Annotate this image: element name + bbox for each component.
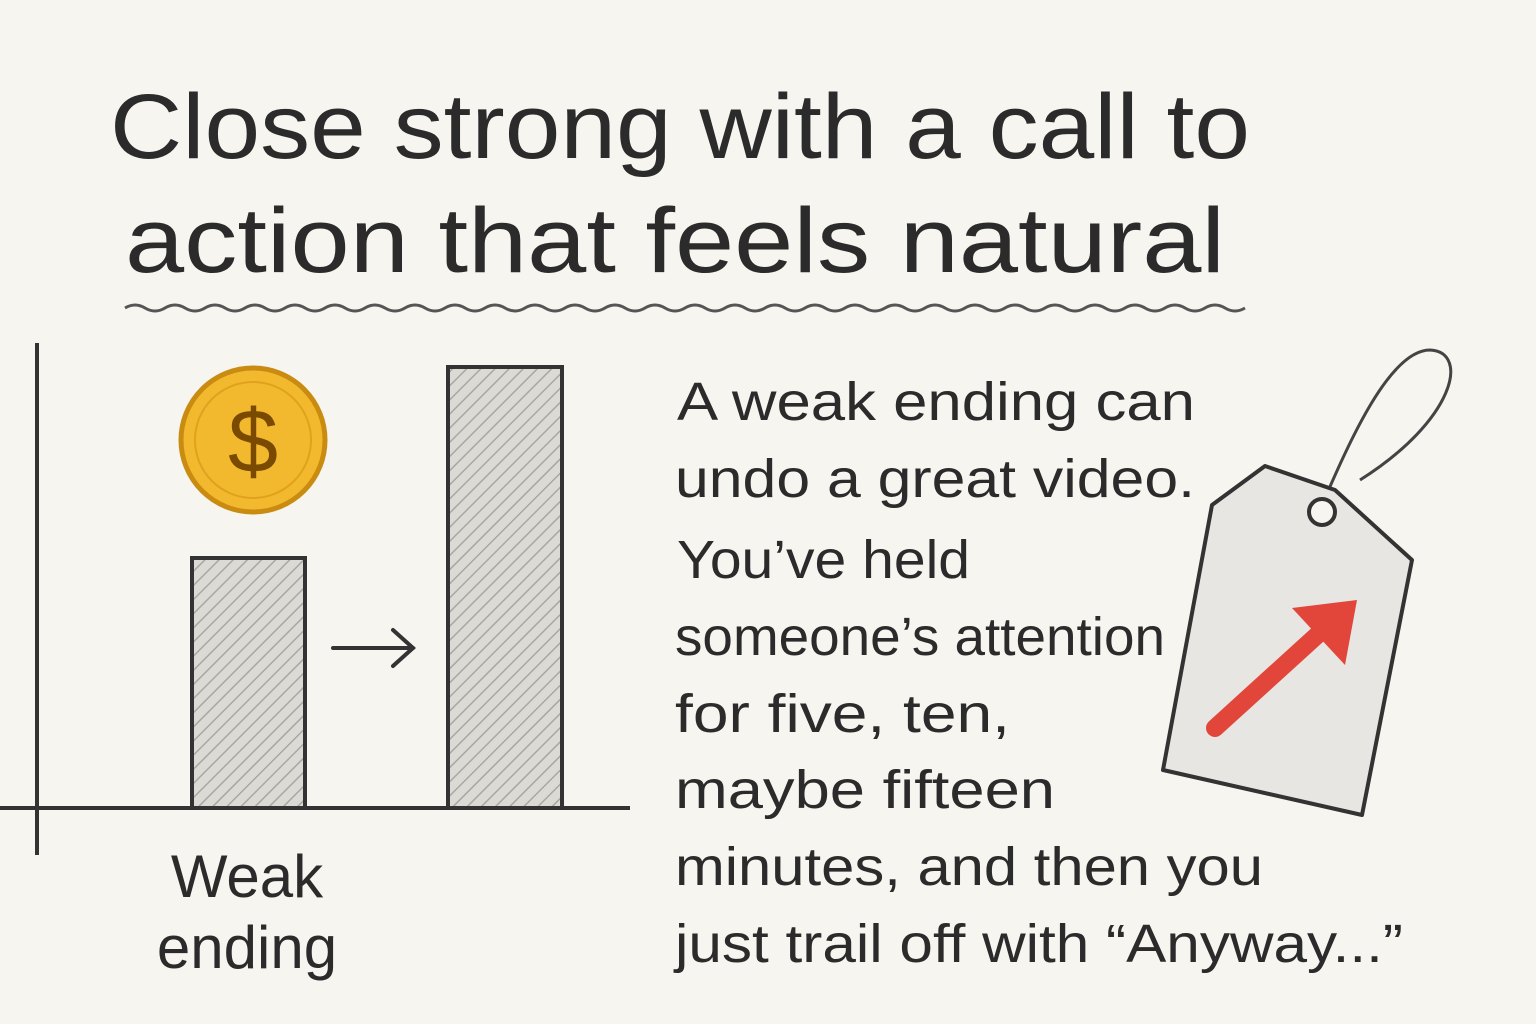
paragraph: for five, ten, xyxy=(675,684,1010,744)
arrow between bars xyxy=(333,630,413,666)
icon: dollar coin: $ xyxy=(228,392,278,492)
title: Close strong with a call to xyxy=(110,76,1250,178)
paragraph: just trail off with “Anyway...” xyxy=(673,914,1403,974)
paragraph: A weak ending can xyxy=(677,372,1195,432)
red arrow xyxy=(1215,600,1357,728)
icon: price tag with arrow xyxy=(1163,350,1451,815)
bar: weak ending xyxy=(192,558,305,808)
icon: dollar coin xyxy=(181,368,325,512)
wavy underline xyxy=(125,305,1245,311)
label: weak ending: Weak xyxy=(171,843,324,910)
bar: strong ending xyxy=(448,367,562,808)
paragraph: someone’s attention xyxy=(675,607,1165,667)
label: weak ending: ending xyxy=(157,914,337,981)
title xyxy=(110,76,1250,292)
paragraph: maybe fifteen xyxy=(675,760,1055,820)
paragraph: undo a great video. xyxy=(675,449,1195,509)
label: weak ending xyxy=(157,843,337,981)
title: action that feels natural xyxy=(125,190,1225,292)
paragraph xyxy=(673,372,1403,974)
paragraph: minutes, and then you xyxy=(675,837,1263,897)
paragraph: You’ve held xyxy=(677,530,970,590)
bar chart xyxy=(0,343,630,855)
